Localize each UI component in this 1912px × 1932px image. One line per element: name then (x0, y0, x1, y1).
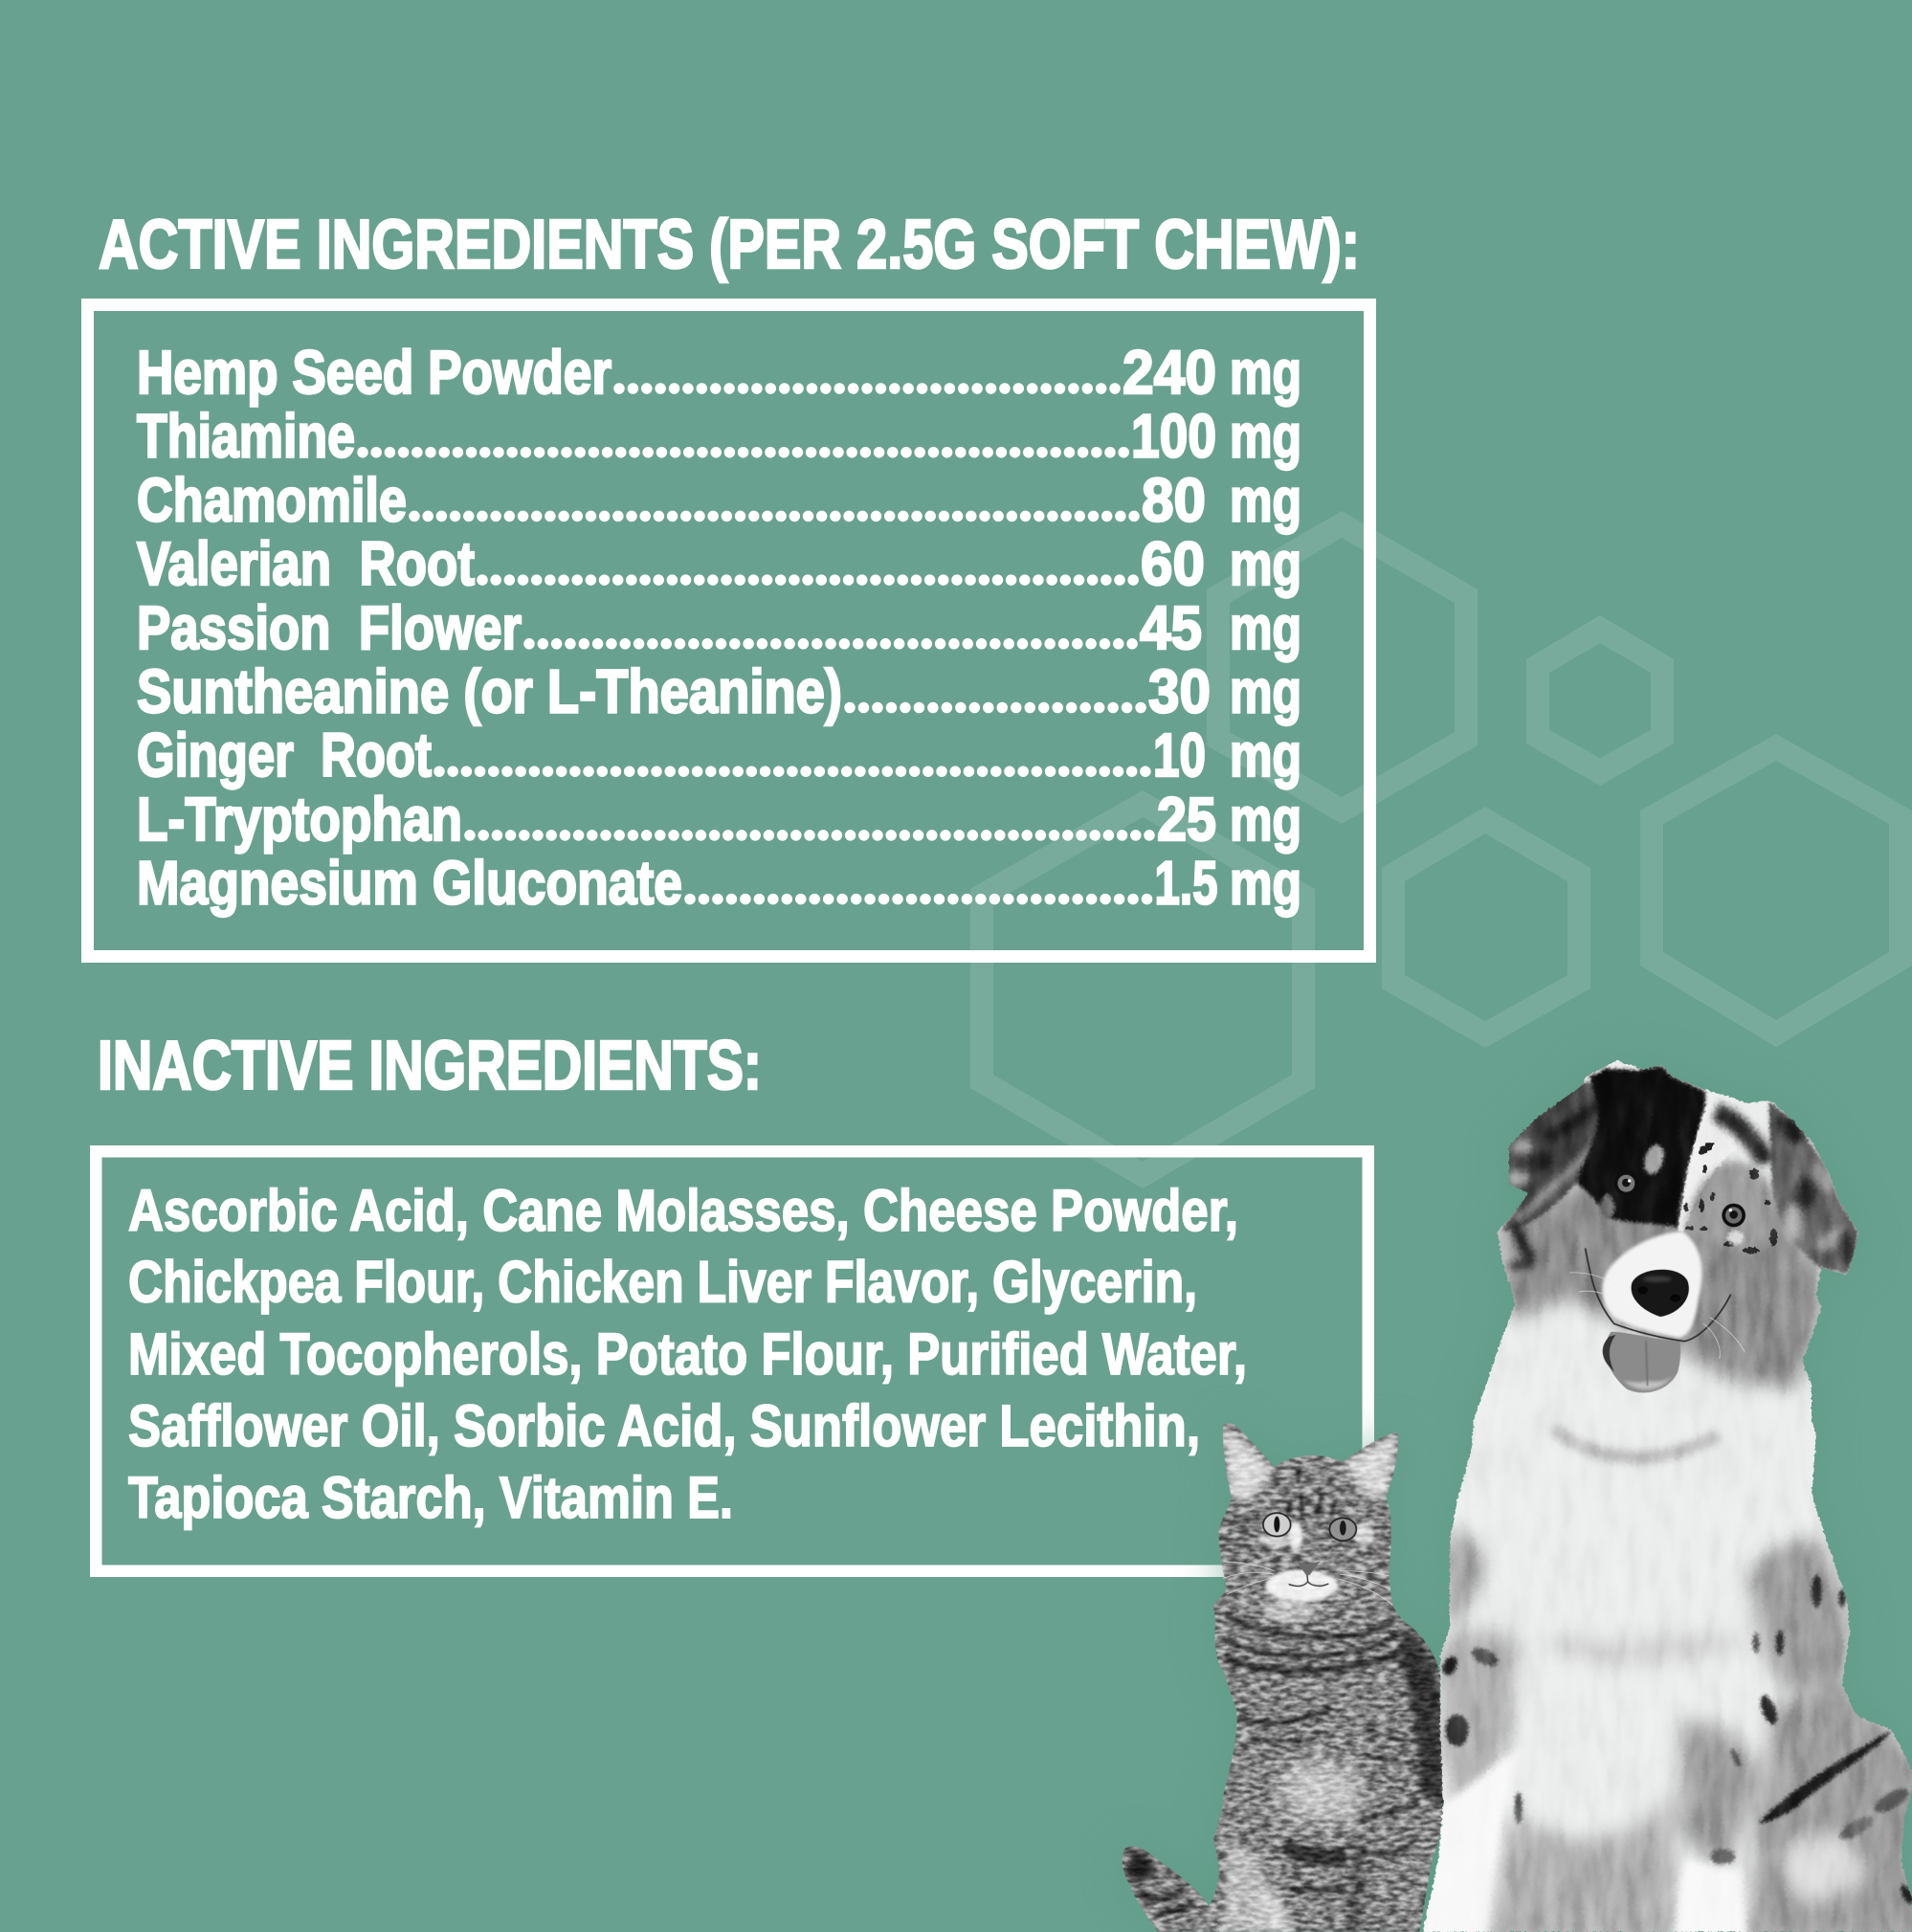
row: suntheanine: 30 (1148, 656, 1211, 725)
dog fur body (1416, 1043, 1912, 1932)
row: suntheanine: Suntheanine (or L-Theanine) (137, 656, 842, 725)
row: chamomile: Chamomile (137, 465, 407, 534)
row: magnesium gluconate: 1.5 (1154, 849, 1217, 918)
cat face: eyes, nose, whiskers (1223, 1513, 1392, 1605)
row: chamomile: 80 (1142, 465, 1206, 534)
row: hemp seed powder (137, 338, 1301, 407)
dog face: eyes, muzzle, nose, tongue (1569, 1171, 1745, 1392)
row: hemp seed powder: 240 (1123, 338, 1216, 407)
soft shadow behind animals (1123, 1060, 1912, 1932)
row: magnesium gluconate: mg (1230, 849, 1301, 918)
cat fur body (1122, 1423, 1444, 1932)
panel: inactive ingredients (96, 1151, 1368, 1571)
row: thiamine (137, 402, 1301, 471)
dog muzzle (1602, 1232, 1701, 1338)
inactive ingredient list: Chickpea Flour, Chicken Liver Flavor, Glycerin, (128, 1250, 1197, 1315)
row: valerian root: mg (1230, 529, 1301, 598)
row: magnesium gluconate: Magnesium Gluconate (137, 849, 682, 918)
inactive ingredient list: Safflower Oil, Sorbic Acid, Sunflower Lecithin, (128, 1393, 1200, 1458)
heading: active ingredients: ACTIVE INGREDIENTS (PER 2.5G SOFT CHEW): (99, 207, 1360, 283)
dog tongue (1603, 1332, 1680, 1392)
row: ginger root: 10 (1153, 721, 1206, 789)
dog body markings (1416, 1429, 1912, 1932)
illustration: australian shepherd dog (1416, 1043, 1912, 1932)
inactive ingredient list: Mixed Tocopherols, Potato Flour, Purified Water, (128, 1321, 1247, 1387)
row: ginger root (137, 721, 1301, 789)
row: l-tryptophan: mg (1230, 785, 1301, 854)
row: l-tryptophan: L-Tryptophan (137, 785, 462, 854)
row: hemp seed powder: Hemp Seed Powder (137, 338, 611, 407)
row: passion flower (137, 593, 1301, 662)
row: chamomile: mg (1230, 465, 1301, 534)
row: passion flower: 45 (1140, 593, 1202, 662)
merle blaze (1677, 1106, 1732, 1232)
decorative hexagons (970, 511, 1912, 1188)
row: passion flower: mg (1230, 593, 1301, 662)
row: thiamine: 100 (1131, 402, 1216, 471)
left ear (1501, 1079, 1601, 1233)
dog head markings (1498, 1065, 1858, 1388)
panel frame (88, 304, 1370, 957)
row: valerian root (137, 529, 1301, 598)
dog nose (1632, 1270, 1689, 1317)
inactive ingredient list: Ascorbic Acid, Cane Molasses, Cheese Powder, (128, 1178, 1238, 1243)
row: thiamine: mg (1230, 402, 1301, 471)
row: suntheanine: mg (1230, 656, 1301, 725)
row: thiamine: Thiamine (137, 402, 355, 471)
row: passion flower: Passion Flower (137, 593, 522, 662)
row: l-tryptophan: 25 (1157, 785, 1216, 854)
inactive ingredient list (128, 1178, 1247, 1530)
row: valerian root: Valerian Root (137, 529, 475, 598)
black blaze (1577, 1065, 1705, 1228)
row: magnesium gluconate (137, 849, 1301, 918)
right ear (1768, 1102, 1858, 1275)
panel: active ingredients (88, 304, 1370, 957)
panel frame (96, 1151, 1368, 1571)
row: l-tryptophan (137, 785, 1301, 854)
row: hemp seed powder: mg (1230, 338, 1301, 407)
inactive ingredient list: Tapioca Starch, Vitamin E. (128, 1465, 733, 1530)
row: ginger root: Ginger Root (137, 721, 432, 789)
dog mouth line (1586, 1249, 1730, 1342)
illustration: tabby cat (1122, 1423, 1444, 1932)
row: ginger root: mg (1230, 721, 1301, 789)
heading: inactive ingredients: INACTIVE INGREDIENTS: (98, 1028, 762, 1104)
dog eye right (1722, 1204, 1745, 1227)
dog whiskers (1569, 1273, 1745, 1359)
row: valerian root: 60 (1141, 529, 1205, 598)
dog eye left (1614, 1171, 1638, 1195)
row: chamomile (137, 465, 1301, 534)
